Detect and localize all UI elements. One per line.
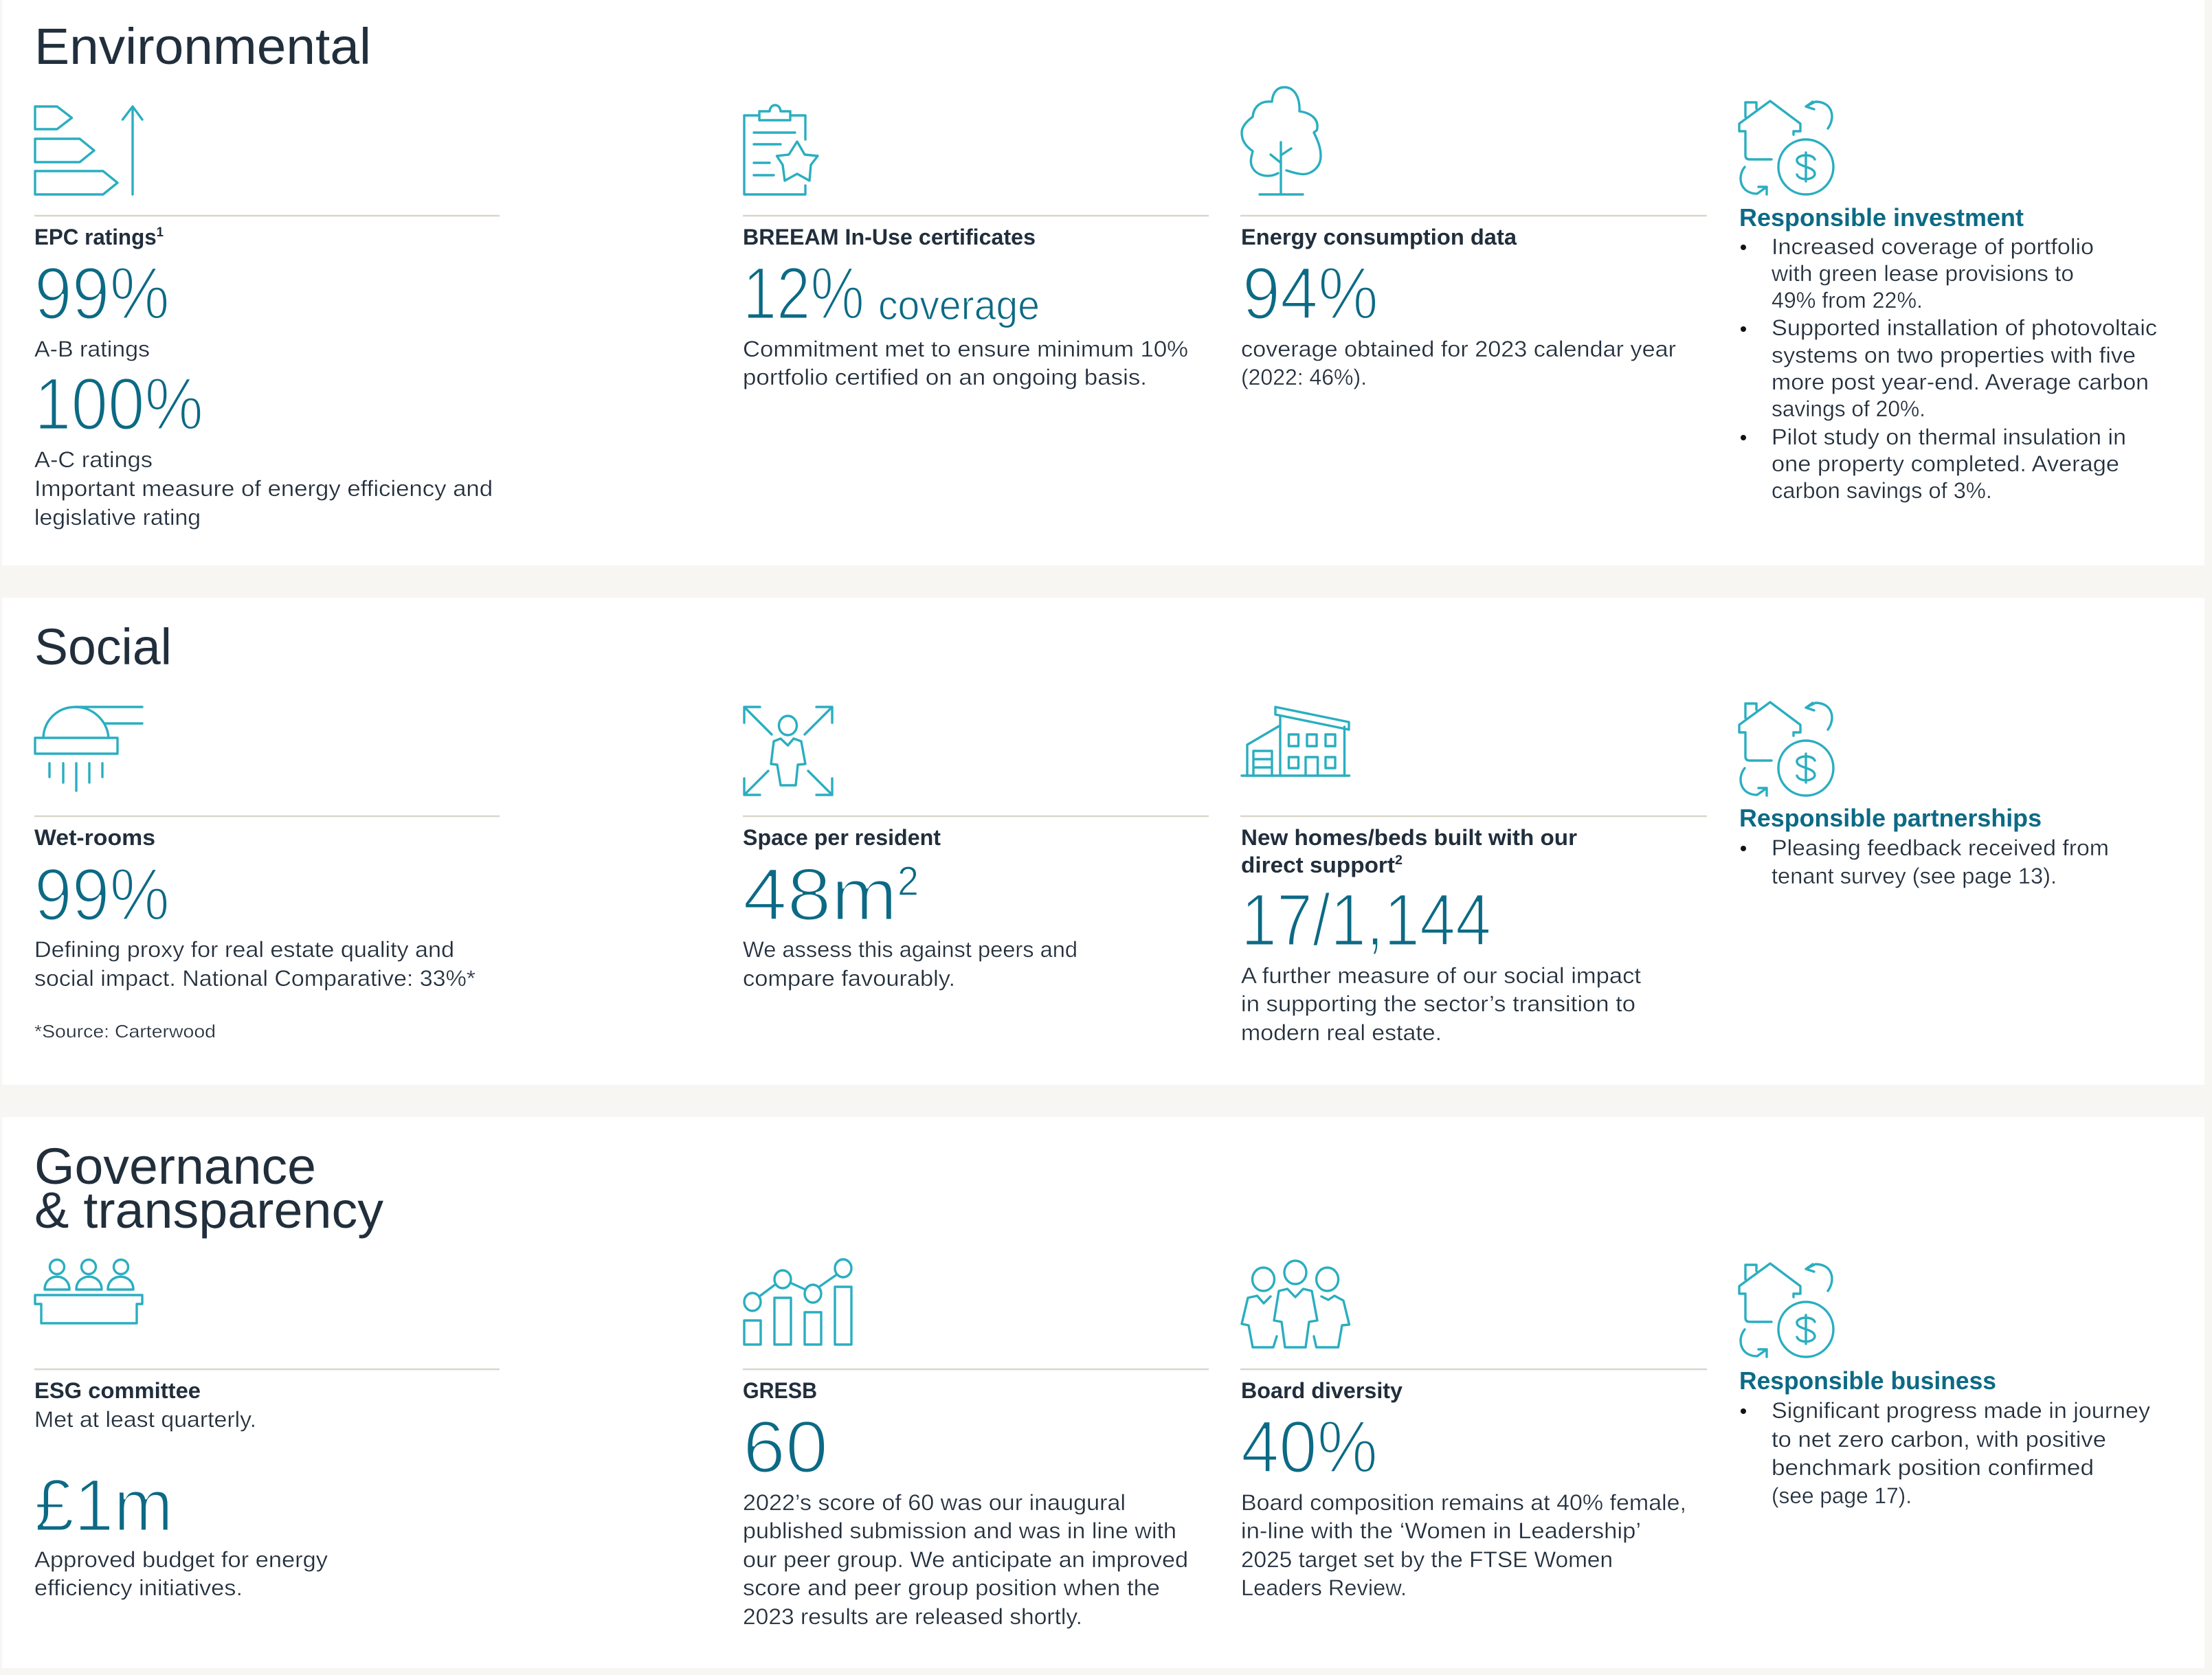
text: met quarterly: Met at least quarterly. (34, 1407, 256, 1432)
text: A-C ratings note: Important measure of energy efficiency and (34, 476, 493, 501)
icon: person with expanding arrows (744, 707, 832, 795)
callout: Responsible business (1739, 1263, 2150, 1508)
label: Energy consumption data: Energy consumption data (1241, 225, 1517, 249)
bullet list: Supported installation of photovoltaic (1772, 315, 2157, 340)
label: EPC ratings: 1 (157, 225, 164, 240)
bullet list: (see page 17). (1772, 1483, 1912, 1508)
callout: Responsible investment (1739, 101, 2157, 503)
icon: tree (1242, 87, 1321, 194)
metric: BREEAM In-Use certificates (743, 105, 1188, 390)
panel: social (2, 598, 2204, 1085)
text: GRESB description (743, 1490, 1188, 1629)
text: space description (743, 937, 1077, 991)
value: 12% coverage: 12% (743, 251, 864, 335)
label: New homes/beds built with our direct support: direct support (1241, 853, 1389, 877)
text: BREEAM description: portfolio certified on an ongoing basis. (743, 365, 1147, 390)
text: A-B ratings: A-B ratings (34, 337, 150, 361)
icon: committee at table (35, 1260, 142, 1323)
text: A-C ratings note (34, 447, 493, 530)
icon: house and coin cycle (1739, 702, 1833, 796)
metric: ESG committee (34, 1260, 328, 1600)
text: A-C ratings note: legislative rating (34, 505, 201, 530)
text: wet-rooms description: social impact. National Comparative: 33%* (34, 966, 476, 991)
metric: Space per resident (743, 707, 1077, 991)
value: £1m: £1m (34, 1463, 173, 1547)
text: BREEAM description: Commitment met to ensure minimum 10% (743, 337, 1188, 361)
bullet list: carbon savings of 3%. (1772, 478, 1992, 503)
icon: bar and line chart (744, 1259, 851, 1345)
bullet list: Increased coverage of portfolio (1772, 234, 2094, 259)
heading: social: Social (34, 618, 172, 675)
icon: shower head (35, 707, 142, 791)
label: New homes/beds built with our direct support: New homes/beds built with our (1241, 825, 1577, 850)
metric: New homes/beds built (1241, 707, 1641, 1045)
source note: *Source: Carterwood (34, 1021, 216, 1042)
bullet list: to net zero carbon, with positive (1772, 1427, 2106, 1452)
text: board description: Board composition remains at 40% female, (1241, 1490, 1686, 1515)
text: energy description: coverage obtained for 2023 calendar year (1241, 337, 1676, 361)
metric: Wet-rooms (34, 707, 476, 1042)
text: energy description (1241, 337, 1676, 390)
metric: Board diversity (1241, 1261, 1686, 1600)
label: EPC ratings: EPC ratings (34, 225, 159, 249)
icon: three people (1242, 1261, 1350, 1347)
heading: governance and transparency (34, 1138, 383, 1239)
text: new homes description: A further measure of our social impact (1241, 963, 1641, 988)
text: A-C ratings note: A-C ratings (34, 447, 153, 472)
text: GRESB description: 2023 results are released shortly. (743, 1604, 1082, 1629)
bullet list: Pilot study on thermal insulation in (1772, 425, 2126, 449)
bullet list (1741, 234, 2157, 503)
bullet list (1741, 835, 2109, 888)
icon: clipboard with star (744, 105, 818, 194)
metric: EPC ratings (34, 106, 493, 530)
bullet list: 49% from 22%. (1772, 288, 1923, 313)
panel: governance and transparency (2, 1117, 2204, 1668)
value: 99%: 99% (34, 251, 170, 335)
text: budget description: Approved budget for energy (34, 1547, 328, 1572)
value: 100%: 100% (34, 362, 203, 445)
text: space description: We assess this against peers and (743, 937, 1077, 962)
label: Board diversity: Board diversity (1241, 1378, 1403, 1403)
heading: governance and transparency: Governance (34, 1138, 316, 1195)
text: board description (1241, 1490, 1686, 1600)
text: GRESB description: our peer group. We anticipate an improved (743, 1547, 1188, 1572)
text: GRESB description: score and peer group position when the (743, 1575, 1160, 1600)
icon: house and coin cycle (1739, 1263, 1833, 1357)
value: 17/1,144: 17/1,144 (1241, 878, 1491, 961)
heading: Responsible investment: Responsible investment (1739, 203, 2024, 232)
bullet list: with green lease provisions to (1771, 261, 2074, 286)
heading: governance and transparency: & transparency (34, 1182, 383, 1239)
label: New homes/beds built with our direct support (1241, 825, 1577, 877)
text: wet-rooms description (34, 937, 476, 991)
text: board description: in-line with the ‘Women in Leadership’ (1241, 1518, 1641, 1543)
bullet list: Pleasing feedback received from (1772, 835, 2109, 860)
label: BREEAM In-Use certificates: BREEAM In-Use certificates (743, 225, 1036, 249)
panel: environmental (2, 0, 2204, 565)
icon: house and coin cycle (1739, 101, 1833, 194)
text: board description: 2025 target set by the FTSE Women (1241, 1547, 1613, 1572)
text: space description: compare favourably. (743, 966, 955, 991)
icon: EPC rating tags with arrow (35, 106, 142, 194)
text: BREEAM description (743, 337, 1188, 390)
bullet list: Significant progress made in journey (1772, 1398, 2150, 1423)
bullet list: savings of 20%. (1772, 396, 1925, 421)
bullet list: benchmark position confirmed (1772, 1455, 2094, 1480)
text: budget description (34, 1547, 328, 1600)
text: board description: Leaders Review. (1241, 1575, 1407, 1600)
text: new homes description: in supporting the sector’s transition to (1241, 991, 1635, 1016)
bullet list: systems on two properties with five (1772, 343, 2136, 368)
metric: Energy consumption data (1241, 87, 1676, 390)
heading: Responsible partnerships: Responsible partnerships (1739, 804, 2042, 832)
label: Wet-rooms: Wet-rooms (34, 825, 155, 850)
text: budget description: efficiency initiatives. (34, 1575, 243, 1600)
bullet list: tenant survey (see page 13). (1772, 864, 2057, 888)
bullet list: one property completed. Average (1772, 451, 2119, 476)
value: 60: 60 (743, 1405, 828, 1488)
text: GRESB description: 2022’s score of 60 was our inaugural (743, 1490, 1126, 1515)
value: 12% coverage (743, 251, 1040, 335)
text: new homes description (1241, 963, 1641, 1045)
heading: Responsible business: Responsible business (1739, 1367, 1996, 1395)
text: energy description: (2022: 46%). (1241, 365, 1367, 390)
label: ESG committee: ESG committee (34, 1378, 201, 1403)
label: GRESB: GRESB (743, 1378, 817, 1403)
heading: environmental: Environmental (34, 18, 371, 75)
value: 40%: 40% (1241, 1405, 1378, 1488)
superscript 2: 2 (897, 858, 919, 904)
text: wet-rooms description: Defining proxy for real estate quality and (34, 937, 454, 962)
bullet list: more post year-end. Average carbon (1772, 370, 2149, 394)
metric: GRESB (743, 1259, 1188, 1629)
text: GRESB description: published submission and was in line with (743, 1518, 1176, 1543)
callout: Responsible partnerships (1739, 702, 2109, 888)
bullet list (1741, 1398, 2150, 1508)
text: new homes description: modern real estate. (1241, 1020, 1442, 1045)
label: Space per resident: Space per resident (743, 825, 941, 850)
value: 94%: 94% (1242, 251, 1378, 335)
value: 99%: 99% (34, 853, 170, 936)
icon: building (1242, 707, 1350, 776)
value: 48m2: 48m (743, 853, 897, 936)
value: 12% coverage: coverage (878, 282, 1040, 328)
label: New homes/beds built with our direct support: 2 (1395, 853, 1403, 868)
